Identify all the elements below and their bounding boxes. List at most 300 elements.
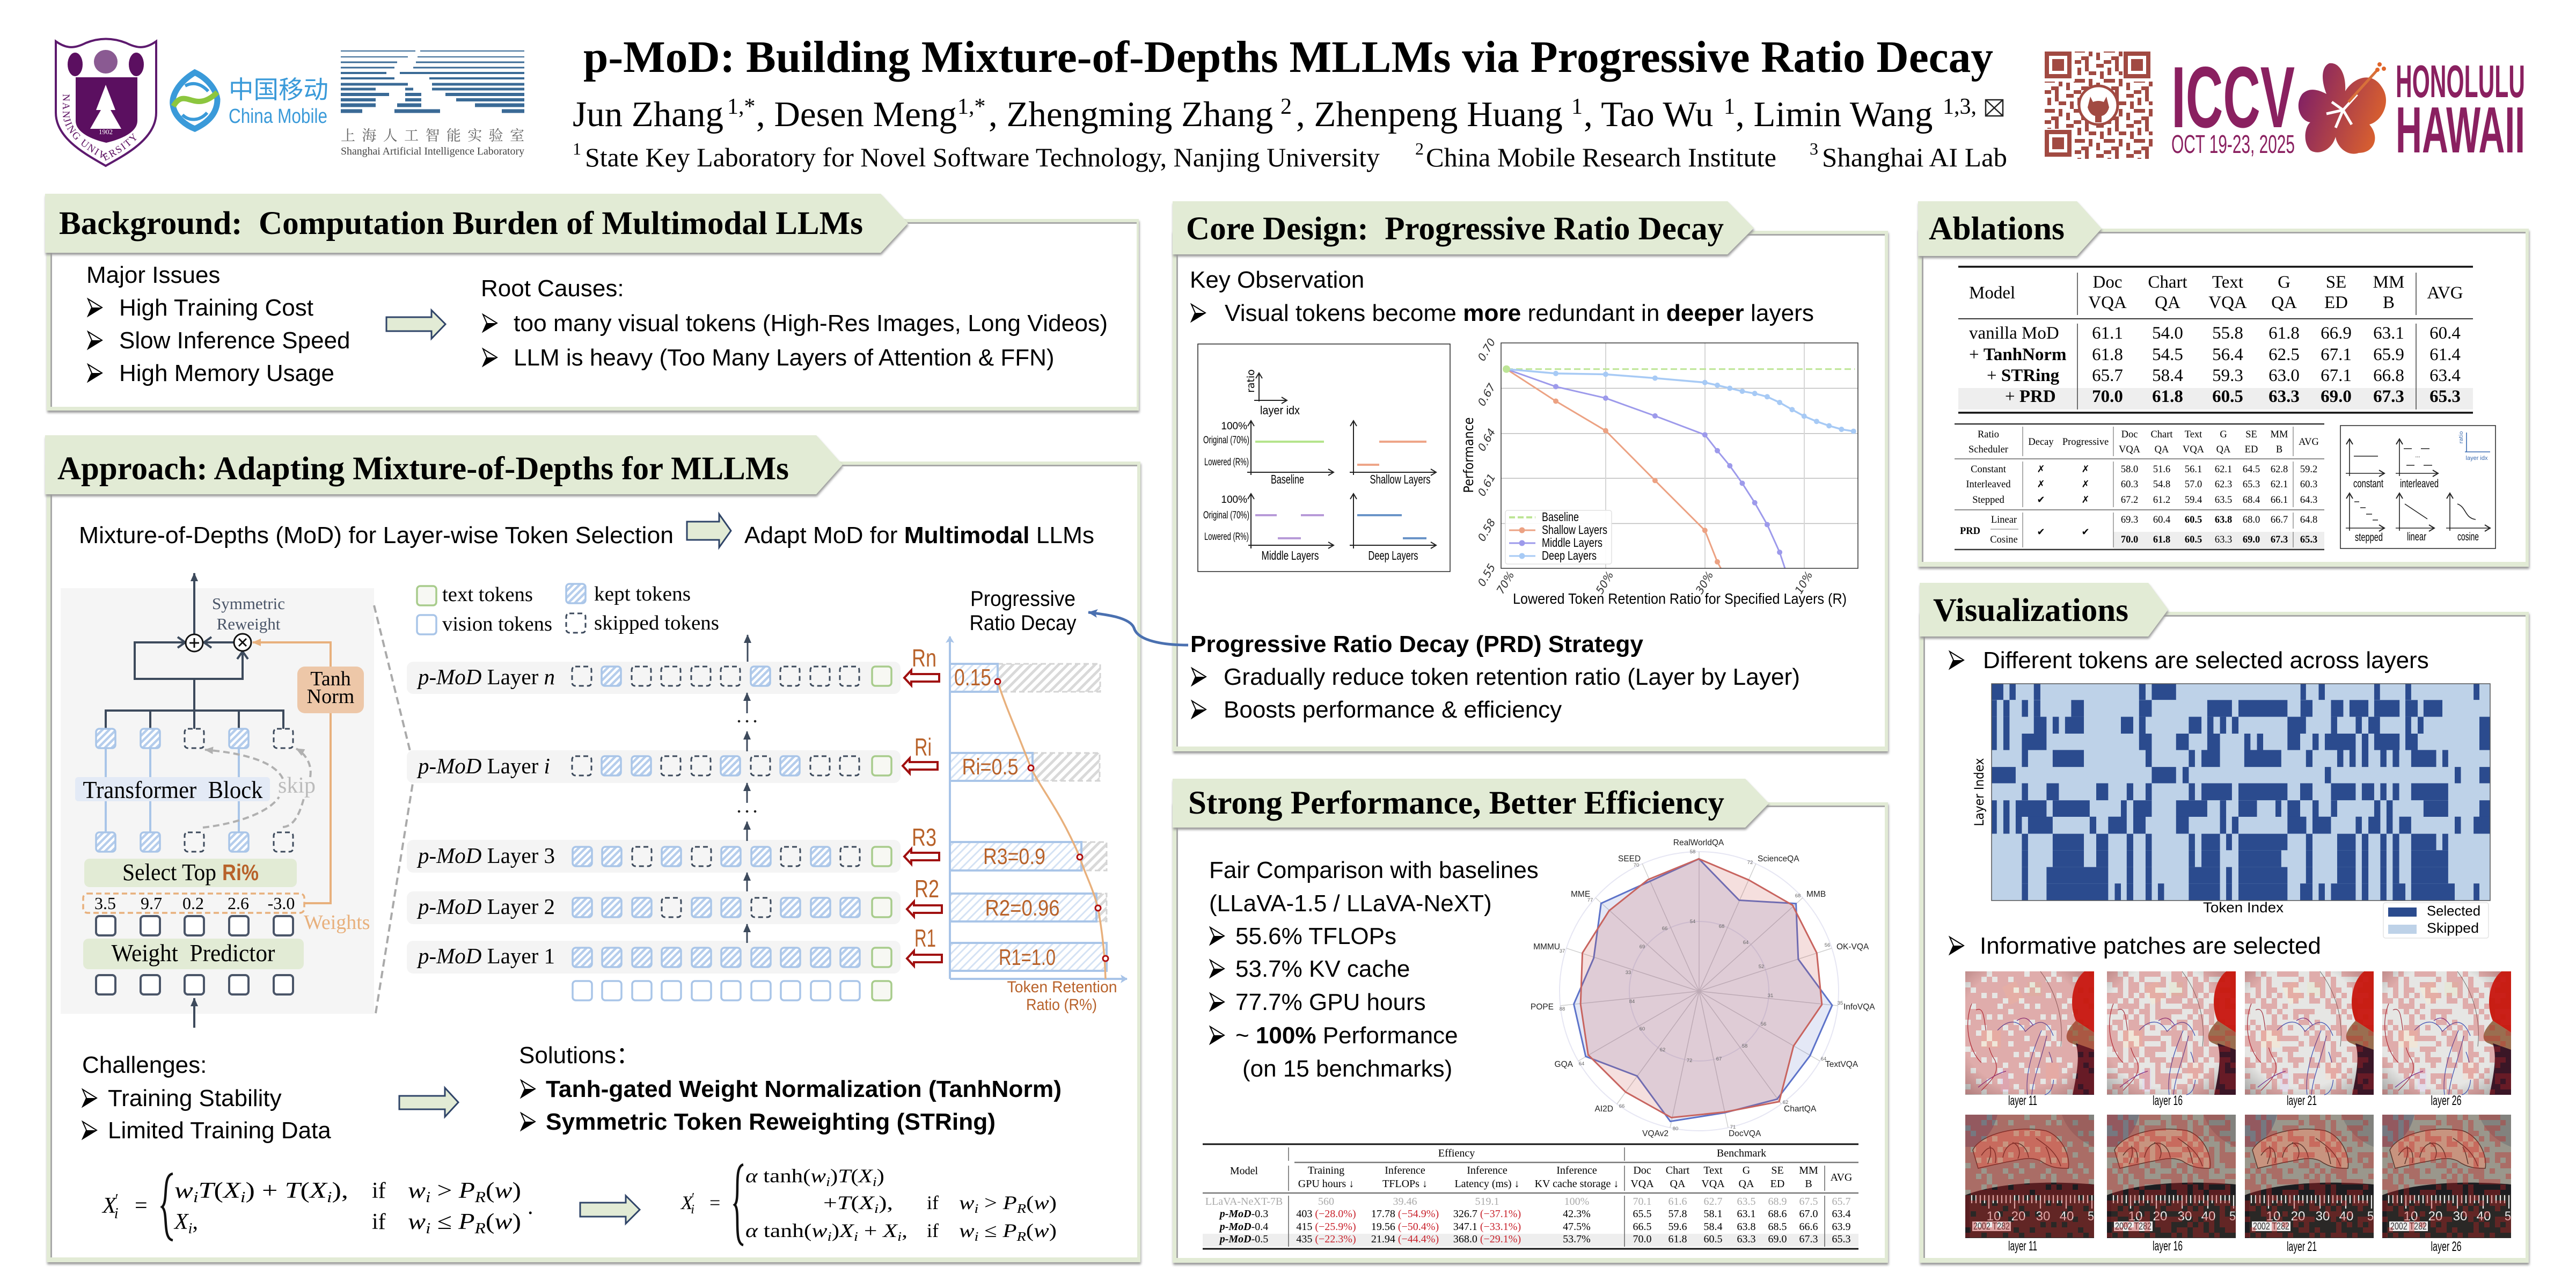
table: ablation results: 67.1 (2321, 366, 2352, 385)
table: ablation results: 54.0 (2152, 324, 2183, 343)
tanh norm box: Tanh (310, 668, 351, 690)
diagram: ratio scheduler shapes: constant (2353, 478, 2383, 490)
affiliations: 2 (1415, 139, 1424, 158)
formula: adapted: i (873, 1175, 877, 1189)
logo: Shanghai AI Laboratory: 上海人工智能实验室 (341, 128, 524, 144)
radar tick values: 80 (1673, 1126, 1678, 1132)
text: adapt MoD: Adapt MoD for Multimodal LLMs (744, 522, 1094, 548)
formula: adapted: i (874, 1202, 879, 1216)
logo: Nanjing University shield: NANJING UNIVERSITY (63, 94, 137, 161)
formula: adapted: α tanh( w (745, 1165, 823, 1187)
photos: artifact row: 5 (2367, 1209, 2374, 1224)
radar tick values: 54 (1690, 919, 1695, 925)
text block: solutions (519, 1042, 1062, 1135)
table: ratio schedulers: 54.8 (2153, 479, 2170, 490)
diagram: layer selection schematic: Lowered (R%) (1204, 457, 1249, 468)
formula: original: = (135, 1194, 148, 1218)
formula: adapted: X (882, 1220, 898, 1241)
formula: original: ′ (115, 1191, 119, 1208)
table: efficiency and benchmark: 403 (1296, 1208, 1315, 1220)
table: ablation results: Text (2212, 273, 2243, 292)
logo: Shanghai AI Laboratory (341, 51, 524, 157)
formula: original: w (408, 1210, 426, 1234)
table: efficiency and benchmark: 67.3 (1799, 1233, 1818, 1245)
table: efficiency and benchmark: 53.7% (1563, 1233, 1591, 1245)
QR code (2045, 52, 2153, 159)
table: ratio schedulers: 59.4 (2185, 495, 2202, 506)
x axis label: Lowered Token Retention Ratio for Specified Layers (R) (1513, 590, 1847, 607)
table: ratio schedulers: 63.3 (2215, 535, 2232, 545)
select top box: Ri% (222, 860, 259, 885)
arrow: PRD to progressive ratio decay (1088, 612, 1188, 645)
weight values: 2.6 (228, 894, 249, 913)
heading: strong performance: Strong Performance, Better Efficiency (1188, 785, 1724, 821)
table: efficiency and benchmark: 61.8 (1668, 1233, 1687, 1245)
table: ratio schedulers: 60.3 (2300, 479, 2317, 490)
table: ratio schedulers: Interleaved (1966, 479, 2011, 490)
table: efficiency and benchmark: 519.1 (1475, 1196, 1499, 1208)
legend: tokens: skipped tokens (594, 612, 719, 634)
table: efficiency and benchmark: 47.5% (1563, 1221, 1591, 1233)
radar tick values: 88 (1560, 1006, 1565, 1012)
captions: artifact row: layer 11 (2008, 1239, 2037, 1254)
table: efficiency and benchmark: AVG (1831, 1172, 1852, 1183)
radar tick values: 72 (1687, 1058, 1692, 1064)
ratio arrows: R1 (914, 924, 936, 952)
formula: original: if (372, 1179, 386, 1203)
table: ablation results: ED (2324, 293, 2348, 312)
authors: , Limin Wang (1736, 94, 1933, 134)
table: efficiency and benchmark: Doc (1633, 1165, 1651, 1176)
logo: Nanjing University shield: 1902 (99, 128, 113, 136)
table: efficiency and benchmark: VQA (1630, 1178, 1654, 1190)
radar tick values: 69 (1640, 944, 1645, 950)
table: ratio schedulers: 67.3 (2271, 535, 2288, 545)
table: efficiency and benchmark: 58.4 (1703, 1221, 1723, 1233)
table: ablation results: B (2383, 293, 2395, 312)
table: efficiency and benchmark: 39.46 (1393, 1196, 1417, 1208)
table: ratio schedulers: 60.3 (2121, 479, 2138, 490)
text: comparison (1209, 857, 1539, 1082)
table: efficiency and benchmark: Text (1703, 1165, 1723, 1176)
table: efficiency and benchmark: -0.3 (1252, 1208, 1268, 1220)
layer 2: p-MoD Layer 2 (416, 894, 555, 919)
legend: tokens: text tokens (442, 583, 533, 606)
formula: original: w) (495, 1179, 520, 1203)
radar tick values: 72 (1747, 860, 1753, 866)
authors: 1,* (727, 94, 756, 119)
diagram: ratio scheduler shapes: linear (2407, 531, 2426, 543)
y axis label: Layer Index (1972, 758, 1987, 826)
formula: original: i (193, 1189, 199, 1206)
table: efficiency and benchmark: Inference (1556, 1165, 1597, 1176)
table: efficiency and benchmark: GPU hours ↓ (1298, 1178, 1354, 1190)
text: comparison: Fair Comparison with baselines (1209, 857, 1539, 883)
table: ratio schedulers: 63.8 (2215, 515, 2232, 525)
table: ratio schedulers: Progressive (2062, 437, 2109, 448)
photos: artifact row: 40 (2060, 1209, 2074, 1224)
table: efficiency and benchmark: LLaVA-NeXT-7B (1205, 1196, 1283, 1208)
input tokens row (573, 981, 891, 1000)
table: efficiency and benchmark: (−22.3%) (1315, 1233, 1356, 1245)
radar tick values: 62 (1783, 1100, 1788, 1106)
table: ablation results: 65.9 (2373, 345, 2404, 364)
table: efficiency and benchmark: Model (1230, 1165, 1258, 1177)
table: efficiency and benchmark: p-MoD (1219, 1221, 1252, 1233)
formula: original: if (372, 1210, 386, 1234)
table: ablation results: + PRD (2005, 387, 2056, 406)
table: ratio schedulers: 64.5 (2243, 464, 2260, 475)
radar axis labels: DocVQA (1729, 1129, 1761, 1138)
formula: original: T(X (285, 1179, 324, 1203)
formula: adapted: ≤ (978, 1220, 1002, 1241)
token connectors (106, 711, 283, 729)
table: efficiency and benchmark: 70.0 (1633, 1233, 1652, 1245)
table: ratio schedulers: 65.3 (2300, 535, 2317, 545)
table: efficiency and benchmark: 19.56 (1371, 1221, 1398, 1233)
photos: artifact row: 10 (2266, 1209, 2280, 1224)
formula: original: (X (214, 1179, 237, 1203)
table: efficiency and benchmark: 65.3 (1832, 1233, 1850, 1245)
table: ablation results: 66.9 (2321, 324, 2352, 343)
table: ablation results: 70.0 (2092, 387, 2123, 406)
affiliations: 1 (573, 139, 581, 158)
layer 1: p-MoD Layer 1 (416, 943, 555, 968)
diagram: layer selection schematic: Middle Layers (1261, 548, 1319, 562)
table: ratio schedulers: 64.3 (2300, 495, 2317, 506)
formula: adapted: R (1016, 1230, 1026, 1244)
table: ablation results: 61.8 (2092, 345, 2123, 364)
text: comparison: 55.6% TFLOPs (1235, 923, 1396, 949)
formula: adapted: X (680, 1192, 694, 1213)
authors: , Tao Wu (1584, 94, 1713, 134)
table: efficiency and benchmark: 17.78 (1371, 1208, 1398, 1220)
text: informative patches: Informative patches are selected (1980, 933, 2321, 959)
text: PRD strategy (1190, 631, 1800, 723)
icon: envelope (1986, 100, 2003, 116)
radar axis labels: SEED (1618, 854, 1641, 863)
table: ratio schedulers: G (2220, 429, 2227, 440)
table: ratio schedulers: Constant (1971, 464, 2007, 475)
chart: progressive ratio decay bars (950, 587, 1127, 1014)
x axis label: Token Retention (1007, 978, 1117, 996)
authors: 2 (1280, 94, 1292, 119)
table: ablation results: 61.8 (2152, 387, 2183, 406)
table: ratio schedulers (1955, 424, 2324, 550)
input tokens to block (96, 832, 293, 852)
table: efficiency and benchmark: 65.7 (1832, 1196, 1850, 1208)
logo: ICCV 2025 Honolulu: ICCV (2171, 49, 2295, 146)
text: key observation: Key Observation (1190, 267, 1364, 293)
formula: original: . (528, 1195, 533, 1219)
table: efficiency and benchmark: (−50.4%) (1398, 1221, 1439, 1233)
table: efficiency and benchmark: 42.3% (1563, 1208, 1591, 1220)
table: efficiency and benchmark: 63.9 (1832, 1221, 1850, 1233)
weight values: -3.0 (268, 894, 295, 913)
heading: approach (45, 435, 843, 494)
radar tick values: 62 (1660, 1047, 1665, 1053)
authors: 1 (1724, 94, 1735, 119)
formula: adapted: i (974, 1202, 978, 1216)
table: efficiency and benchmark: VQA (1701, 1178, 1725, 1190)
y tick labels: 0.67 (1475, 381, 1498, 408)
formula: original: P (458, 1210, 475, 1234)
authors: Jun Zhang (573, 94, 723, 134)
table: efficiency and benchmark: 66.5 (1633, 1221, 1652, 1233)
affiliations: 3 (1810, 139, 1818, 158)
photos: artifact row: 5 (2088, 1209, 2094, 1224)
heatmap legend: Selected (2427, 903, 2480, 919)
arrow: MoD to adapted MoD (687, 514, 731, 547)
captions: artifact row: layer 21 (2287, 1239, 2317, 1254)
table: efficiency and benchmark: 63.3 (1737, 1233, 1756, 1245)
heading: visualizations: Visualizations (1933, 592, 2128, 628)
formula: adapted: = (709, 1192, 720, 1213)
retained bars (950, 664, 1107, 971)
text block: root causes: too many visual tokens (High-Res Images, Long Videos) (514, 310, 1108, 336)
formula: adapted: +T(X (823, 1192, 871, 1213)
table: efficiency and benchmark: 368.0 (1453, 1233, 1480, 1245)
affiliation 1: State Key Laboratory for Novel Software Technology, Nanjing University (585, 142, 1380, 172)
legend: tokens: kept tokens (594, 583, 691, 605)
chart legend: Baseline (1542, 510, 1579, 524)
photos: artifact row: 2002 T282 (2115, 1221, 2151, 1232)
bar value 2: R2=0.96 (985, 895, 1059, 920)
photos: artifact row: 20 (2291, 1209, 2305, 1224)
table: ratio schedulers: QA (2155, 444, 2169, 455)
table: ratio schedulers: Chart (2150, 429, 2173, 440)
table: ratio schedulers: 69.0 (2243, 535, 2260, 545)
table: efficiency and benchmark: 63.1 (1737, 1208, 1756, 1220)
text block: root causes (481, 275, 1108, 371)
table: efficiency and benchmark: -0.4 (1252, 1221, 1268, 1233)
affiliation 2: China Mobile Research Institute (1426, 142, 1776, 172)
heading: visualizations (1920, 583, 2168, 636)
logo: ICCV 2025 Honolulu: OCT 19-23, 2025 (2171, 130, 2295, 159)
text block: root causes: LLM is heavy (Too Many Layers of Attention & FFN) (514, 345, 1055, 371)
legend: tokens (417, 583, 719, 635)
table: efficiency and benchmark: 100% (1564, 1196, 1589, 1208)
table: ablation results: 55.8 (2212, 324, 2243, 343)
table: ratio schedulers: PRD (1960, 526, 1980, 537)
radar tick values: 64 (1821, 1056, 1826, 1062)
radar tick values: 64 (1579, 1061, 1584, 1067)
text: PRD strategy: Progressive Ratio Decay (PRD) Strategy (1190, 631, 1644, 657)
table: ratio schedulers: 62.3 (2215, 479, 2232, 490)
ratio arrows (903, 644, 942, 966)
table: efficiency and benchmark: Latency (ms) ↓ (1454, 1178, 1520, 1190)
table: ablation results: 63.3 (2268, 387, 2300, 406)
text block: root causes: Root Causes: (481, 275, 624, 302)
table: ratio schedulers: 62.8 (2271, 464, 2288, 475)
diagram: layer selection schematic (1198, 344, 1450, 572)
select top box: Select Top (122, 859, 216, 885)
text block: challenges: Limited Training Data (108, 1117, 331, 1144)
formula: original: i (426, 1220, 430, 1237)
radar axis labels: OK-VQA (1836, 942, 1869, 952)
weight values: 9.7 (141, 894, 162, 913)
tanh norm box: Norm (307, 685, 354, 708)
panel: core design (1088, 201, 1888, 751)
table: efficiency and benchmark: 57.8 (1668, 1208, 1687, 1220)
ratio arrows: R2 (914, 875, 939, 903)
radar tick values: 71 (1730, 1124, 1736, 1130)
logo: China Mobile: China Mobile (229, 105, 327, 128)
photos: artifact row: 20 (2428, 1209, 2442, 1224)
formula: adapted: i (826, 1175, 830, 1189)
table: efficiency and benchmark: 435 (1296, 1233, 1315, 1245)
table: ablation results: 65.3 (2429, 387, 2461, 406)
y tick labels: 0.64 (1475, 426, 1498, 453)
table: efficiency and benchmark: G (1743, 1165, 1750, 1176)
table: ratio schedulers: 64.8 (2300, 515, 2317, 525)
table: ratio schedulers: 69.3 (2121, 515, 2138, 525)
layer i (407, 750, 901, 783)
zoom guide lines (374, 605, 413, 1013)
table: ablation results: 59.3 (2212, 366, 2243, 385)
chart legend: Middle Layers (1542, 536, 1602, 550)
captions: artifact row (2008, 1239, 2461, 1254)
authors: 1 (1571, 94, 1583, 119)
diagram: layer selection schematic: Lowered (R%) (1204, 531, 1249, 543)
x axis label: Token Index (2203, 899, 2284, 916)
photos: artifact row: 30 (2316, 1209, 2330, 1224)
text block: challenges: Challenges: (82, 1052, 207, 1078)
text: different tokens: Different tokens are selected across layers (1983, 647, 2429, 674)
affiliation 3: Shanghai AI Lab (1822, 142, 2007, 172)
radar tick values: 37 (1560, 948, 1565, 954)
formula: original: R (474, 1189, 486, 1206)
table: ablation results: + STRing (1987, 366, 2060, 385)
table: ratio schedulers: 63.5 (2215, 495, 2232, 506)
authors: 1,3, (1943, 94, 1977, 119)
table: ratio schedulers: 60.5 (2185, 515, 2202, 525)
ratio arrows: R3 (912, 823, 936, 851)
formula: original: i (240, 1189, 246, 1206)
radar axis labels: MMMU (1533, 942, 1560, 952)
table: ablation results: Model (1969, 283, 2015, 303)
table: ratio schedulers: ✗ (2081, 479, 2090, 490)
table: ablation results: 63.4 (2429, 366, 2461, 385)
input tokens (96, 975, 293, 994)
text: comparison: 77.7% GPU hours (1235, 989, 1426, 1015)
chart title: Progressive (970, 587, 1075, 611)
weight values: 0.2 (182, 894, 204, 913)
ratio arrows: Rn (912, 644, 936, 672)
table: ratio schedulers: Cosine (1990, 535, 2018, 545)
radar axis labels: ChartQA (1784, 1104, 1817, 1114)
table: efficiency and benchmark: 21.94 (1371, 1233, 1398, 1245)
ratio arrows: Ri (914, 733, 932, 761)
formula: adapted: X (838, 1220, 855, 1241)
formula: adapted: i (975, 1230, 978, 1244)
arrow: formula transition (580, 1196, 640, 1224)
table: efficiency and benchmark: (−37.1%) (1480, 1208, 1521, 1220)
layer 3 (407, 840, 901, 873)
radar tick values: 64 (1743, 940, 1748, 946)
table: ratio schedulers: 61.8 (2153, 535, 2170, 545)
table: ablation results: 66.8 (2373, 366, 2404, 385)
heading: ablations: Ablations (1929, 211, 2065, 247)
table: ablation results: 54.5 (2152, 345, 2183, 364)
diagram: layer selection schematic: 100% (1221, 494, 1247, 506)
table: ablation results (1958, 267, 2473, 413)
chart lines (1506, 369, 1855, 568)
photos: whiteboard row (1965, 971, 2511, 1095)
formula: original: , (192, 1210, 198, 1234)
weight values: 3.5 (94, 894, 116, 913)
radar tick values: 56 (1825, 942, 1830, 948)
formula: adapted: if (927, 1220, 939, 1241)
formula: adapted: w) (1034, 1192, 1056, 1213)
photos: artifact row: 2002 T282 (2390, 1221, 2427, 1232)
text: symmetric reweight: Symmetric (212, 594, 285, 613)
radar tick values: 56 (1761, 1021, 1766, 1027)
formula: adapted: i (828, 1230, 832, 1244)
transformer block: Transformer Block (83, 776, 263, 803)
text block: challenges: Training Stability (108, 1085, 282, 1111)
table: efficiency and benchmark: -0.5 (1252, 1233, 1268, 1245)
table: efficiency and benchmark: 70.1 (1633, 1196, 1652, 1208)
table: ablation results: SE (2326, 273, 2346, 292)
chart legend (1505, 510, 1612, 564)
table: efficiency and benchmark: B (1805, 1178, 1812, 1190)
table: efficiency and benchmark: 67.5 (1799, 1196, 1818, 1208)
text: comparison: (LLaVA-1.5 / LLaVA-NeXT) (1209, 890, 1492, 917)
table: ablation results: 63.1 (2373, 324, 2404, 343)
formula: original: R (474, 1220, 486, 1237)
table: ratio schedulers: VQA (2119, 444, 2141, 455)
weight predictor: Weight Predictor (112, 939, 275, 967)
radar tick values: 33 (1626, 970, 1631, 976)
authors: , Zhenpeng Huang (1296, 94, 1563, 134)
x axis label: Ratio (R%) (1026, 996, 1097, 1014)
diagram: layer selection schematic: Original (70%) (1203, 435, 1249, 446)
text: comparison: ~ 100% Performance (1235, 1022, 1458, 1049)
formula: adapted: T(X (838, 1165, 870, 1187)
heading: background: Background: Computation Burden of Multimodal LLMs (59, 206, 863, 241)
text block: major issues: Slow Inference Speed (119, 327, 350, 354)
y tick labels (1475, 336, 1498, 589)
table: ratio schedulers: ✗ (2081, 464, 2090, 475)
table: ratio schedulers: 68.4 (2243, 495, 2260, 506)
layers stack (407, 635, 901, 1000)
table: ratio schedulers: 57.0 (2185, 479, 2202, 490)
radar axis labels: GQA (1555, 1060, 1574, 1069)
heading: strong performance (1173, 779, 1769, 828)
formula: adapted: w (959, 1192, 974, 1213)
x tick labels: 30% (1693, 569, 1716, 596)
photos: artifact row: 20 (2011, 1209, 2025, 1224)
text: PRD strategy: Boosts performance & efficiency (1224, 697, 1562, 723)
legend: tokens: vision tokens (442, 613, 552, 635)
chart legend: Deep Layers (1542, 548, 1597, 562)
chart: radar (1531, 838, 1875, 1138)
formula: adapted: , (902, 1220, 908, 1241)
table: ratio schedulers: 62.1 (2271, 479, 2288, 490)
text: weights: Weights (304, 911, 370, 934)
table: ratio schedulers: ED (2245, 444, 2258, 455)
formula: adapted (680, 1165, 1057, 1245)
table: efficiency and benchmark: 58.1 (1703, 1208, 1723, 1220)
formula: original: ), (332, 1179, 348, 1203)
formula: original: w (408, 1179, 426, 1203)
arrow: output (193, 573, 195, 634)
table: ratio schedulers: ✔ (2081, 526, 2090, 538)
table: ratio schedulers: ✗ (2081, 494, 2090, 506)
logo: Nanjing University shield (55, 38, 157, 167)
bar value 3: R3=0.9 (983, 844, 1045, 869)
